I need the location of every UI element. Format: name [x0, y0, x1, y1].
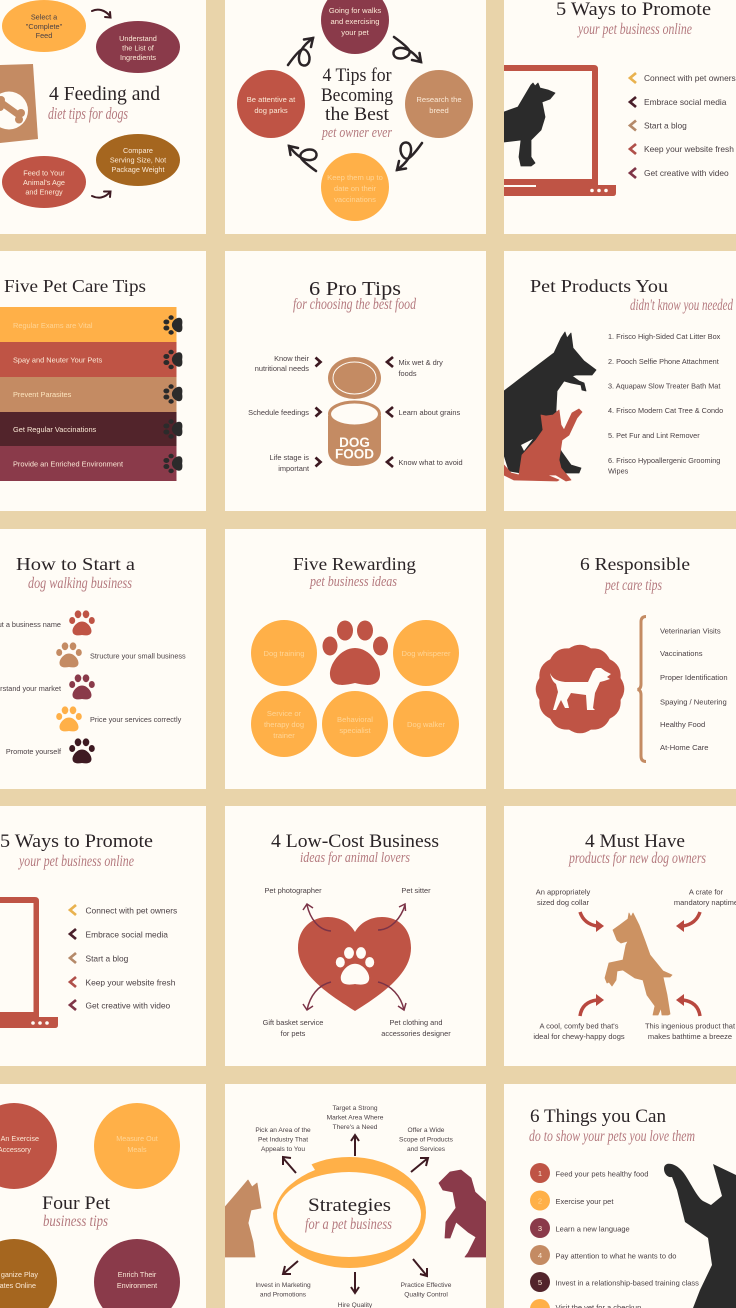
icon: dog silhouette [439, 1170, 486, 1257]
right tips: Know what to avoid [398, 458, 463, 467]
circle: dog walker: Dog walker [407, 720, 445, 729]
step: price services [56, 706, 182, 731]
circle: research the breed: Research the [416, 95, 462, 104]
label: marketing: Invest in Marketing [255, 1282, 311, 1289]
left tips: nutritional needs [255, 364, 309, 373]
arrow: loop top left [288, 38, 313, 66]
circle: going for walks: and exercising [331, 17, 379, 26]
list with chevrons: Start a blog [644, 120, 687, 130]
arrow: loop bottom left [289, 146, 317, 171]
product list: 4. Frisco Modern Cat Tree & Condo [608, 406, 723, 415]
circle: measure out meals: Meals [127, 1145, 147, 1154]
step 4: Pay attention to what he wants to do [556, 1252, 676, 1260]
care list: Vaccinations [660, 649, 703, 658]
circle: going for walks: Going for walks [329, 6, 381, 15]
bubble: select a complete feed: Select a [31, 12, 58, 22]
bubble: understand the list of ingredients: Ingredients [120, 53, 156, 62]
step 2 [530, 1190, 614, 1210]
bar: prevent parasites: Prevent Parasites [13, 390, 72, 399]
icon: cat silhouette [504, 409, 582, 481]
title: 4 Must Have [585, 831, 685, 852]
title: 4 Low-Cost Business [271, 831, 439, 852]
icon: laptop [0, 897, 58, 1028]
label: bed: A cool, comfy bed that's [540, 1022, 619, 1030]
circle: service dog trainer: therapy dog [264, 720, 304, 729]
arrow: loop bottom right [397, 142, 422, 170]
card: 4 feeding and diet tips [0, 0, 206, 234]
circle: behavioral specialist: Behavioral [337, 715, 373, 724]
circle: research the breed: breed [429, 106, 449, 115]
care list: Healthy Food [660, 720, 705, 729]
product list: 6. Frisco Hypoallergenic Grooming [608, 456, 720, 465]
list with chevrons: Get creative with video [644, 168, 729, 178]
icon: dog food can: DOG [339, 435, 370, 450]
bar: regular exams [0, 307, 176, 342]
bubble: select a complete feed [2, 0, 86, 52]
step: price services: Price your services correctly [90, 715, 182, 724]
title: Four Pet [42, 1193, 111, 1214]
bubble: understand the list of ingredients [96, 21, 180, 73]
card: strategies for a pet business [225, 1084, 486, 1308]
icon: dog silhouette [504, 83, 555, 166]
left tips [248, 354, 320, 473]
bar: spay and neuter: Spay and Neuter Your Pets [13, 356, 102, 364]
circle: service dog trainer [251, 691, 317, 757]
step: structure: Structure your small business [90, 652, 186, 660]
card: five pet care tips [0, 251, 206, 511]
icon: laptop [504, 65, 616, 196]
subtitle script: your pet business online [18, 853, 134, 870]
circle: dog walker [393, 691, 459, 757]
title: How to Start a [16, 554, 135, 574]
subtitle script: your pet business online [577, 21, 692, 38]
arrow: top curve [92, 10, 110, 18]
title: 4 Tips for [322, 65, 392, 86]
list with chevrons [70, 905, 177, 1010]
subtitle script: business tips [43, 1213, 108, 1230]
right tips [387, 357, 463, 467]
circle: be attentive at dog parks: dog parks [254, 106, 288, 115]
icon: cat silhouette [664, 1164, 736, 1308]
left tips: Know their [274, 354, 310, 363]
subtitle script: diet tips for dogs [48, 104, 128, 123]
step 1: 1 [538, 1169, 542, 1178]
circle: be attentive at dog parks: Be attentive at [247, 95, 296, 104]
label: pet photographer: Pet photographer [264, 886, 322, 895]
card: how to start a dog walking business [0, 529, 206, 789]
label: quality control: Quality Control [404, 1292, 448, 1298]
label: marketing: and Promotions [260, 1292, 307, 1298]
left tips: Life stage is [270, 453, 309, 462]
title: Five Rewarding [293, 554, 416, 574]
subtitle script: pet business ideas [309, 574, 397, 590]
card: 4 must have products [504, 806, 736, 1066]
right tips: Learn about grains [398, 408, 460, 417]
icon: heart with paw [298, 917, 411, 1011]
circle: organize play dates: ganize Play [1, 1270, 38, 1279]
label: gift basket: Gift basket service [263, 1018, 323, 1027]
icon: big paw [322, 620, 388, 685]
step 5 [530, 1272, 699, 1292]
circle: organize play dates: ates Online [0, 1281, 36, 1290]
circle: organize play dates [0, 1239, 57, 1308]
icon: cat silhouette [225, 1180, 261, 1257]
circle: enrich environment [94, 1239, 180, 1308]
subtitle script: pet owner ever [321, 125, 392, 141]
circle: exercise accessory: An Exercise [1, 1134, 39, 1143]
label: clothing designer: accessories designer [381, 1029, 451, 1038]
title: 6 Pro Tips [309, 278, 401, 300]
list with chevrons: Connect with pet owners [86, 906, 177, 916]
circle: keep vaccinations up to date [321, 153, 389, 221]
label: pick an area: Pet Industry That [258, 1136, 308, 1144]
step 6 [530, 1299, 641, 1308]
step 5: Invest in a relationship-based training class [556, 1278, 699, 1288]
bubble: select a complete feed: Feed [36, 31, 52, 40]
step 2: Exercise your pet [556, 1197, 614, 1206]
circle: behavioral specialist: specialist [339, 726, 372, 735]
label: dog collar: An appropriately [536, 888, 591, 896]
title: 5 Ways to Promote [0, 831, 153, 852]
gap between dog legs [521, 439, 533, 451]
circle: enrich environment: Enrich Their [118, 1270, 157, 1279]
icon: badge with dog [536, 645, 624, 733]
step 3: 3 [538, 1224, 542, 1233]
left tips: important [278, 464, 309, 473]
icon: dog silhouette [504, 332, 596, 473]
circle: dog whisperer: Dog whisperer [402, 649, 451, 658]
list with chevrons: Embrace social media [644, 97, 727, 107]
label: offer wide scope: Scope of Products [399, 1136, 454, 1144]
subtitle script: for a pet business [305, 1216, 392, 1233]
list with chevrons: Get creative with video [86, 1000, 171, 1010]
circle: keep vaccinations up to date: date on their [334, 184, 377, 193]
icon: dog food can: FOOD [335, 446, 374, 462]
bubble: feed to age and energy: Feed to Your [23, 168, 65, 178]
arrows around ring [283, 1135, 428, 1293]
subtitle script: ideas for animal lovers [300, 850, 410, 866]
list with chevrons [630, 73, 736, 178]
label: quality control: Practice Effective [401, 1282, 452, 1289]
card: 6 things you can do [504, 1084, 736, 1308]
bubble: understand the list of ingredients: the List of [122, 44, 155, 52]
right tips: foods [398, 369, 417, 378]
circle: measure out meals: Measure Out [116, 1134, 158, 1143]
bubble: compare serving size: Package Weight [111, 165, 165, 174]
label: target market: Target a Strong [332, 1105, 378, 1112]
label: crate: A crate for [689, 888, 724, 896]
step: promote: Promote yourself [6, 747, 62, 756]
step 2: 2 [538, 1196, 542, 1206]
card: five rewarding pet business ideas [225, 529, 486, 789]
circle: service dog trainer: trainer [273, 731, 295, 740]
bar: vaccinations [0, 412, 176, 446]
bubble: feed to age and energy: and Energy [25, 188, 63, 196]
step: business name [0, 610, 95, 635]
product list: 1. Frisco High-Sided Cat Litter Box [608, 332, 721, 341]
care list: Proper Identification [660, 673, 728, 682]
bar: spay and neuter [0, 342, 176, 377]
circle: keep vaccinations up to date: vaccinations [334, 195, 376, 204]
step 4: 4 [538, 1251, 542, 1260]
bubble: select a complete feed: "Complete" [26, 22, 63, 31]
circle: keep vaccinations up to date: Keep them up to [327, 173, 383, 182]
arrows toward dog [580, 912, 700, 1016]
step 3: Learn a new language [556, 1224, 630, 1234]
circle: dog training: Dog training [264, 649, 304, 658]
product list: Wipes [608, 466, 629, 476]
card: 4 low-cost business ideas [225, 806, 486, 1066]
label: target market: There's a Need [333, 1124, 378, 1131]
list with chevrons: Keep your website fresh [644, 144, 734, 154]
circle: service dog trainer: Service or [267, 709, 302, 718]
bubble: feed to age and energy [2, 156, 86, 208]
bar: prevent parasites [0, 377, 176, 412]
bubble: compare serving size [96, 134, 180, 186]
label: offer wide scope: and Services [407, 1146, 446, 1153]
card: 5 ways to promote (lower) [0, 806, 206, 1066]
care list: Veterinarian Visits [660, 626, 721, 636]
list with chevrons: Start a blog [86, 954, 129, 964]
label: bath product: makes bathtime a breeze [648, 1032, 732, 1041]
title: Five Pet Care Tips [4, 276, 146, 296]
icon: terrier silhouette [605, 913, 672, 1015]
title: Pet Products You [530, 276, 668, 296]
label: target market: Market Area Where [327, 1114, 384, 1122]
bubble: understand the list of ingredients: Understand [119, 34, 157, 43]
label: pet sitter: Pet sitter [401, 886, 431, 895]
icon: food bag with bone [0, 64, 38, 143]
title: 6 Things you Can [530, 1106, 666, 1127]
product list: 3. Aquapaw Slow Treater Bath Mat [608, 382, 720, 390]
bubble: compare serving size: Compare [123, 146, 153, 155]
card: 5 ways to promote (top) [504, 0, 736, 234]
circle: behavioral specialist [322, 691, 388, 757]
right tips: Mix wet & dry [398, 358, 443, 367]
circle: measure out meals [94, 1103, 180, 1189]
subtitle script: pet care tips [604, 577, 662, 594]
label: dog collar: sized dog collar [537, 898, 590, 907]
list with chevrons: Keep your website fresh [86, 978, 176, 988]
icons: paws on bars [163, 315, 182, 473]
step 4 [530, 1245, 676, 1265]
bar: enriched environment [0, 446, 176, 481]
bar: regular exams: Regular Exams are Vital [13, 321, 93, 330]
card: pet products [504, 251, 736, 511]
circle: exercise accessory [0, 1103, 57, 1189]
title: 4 Feeding and [49, 83, 160, 105]
left tips: Schedule feedings [248, 408, 309, 417]
bar: vaccinations: Get Regular Vaccinations [13, 425, 97, 434]
step: structure [56, 642, 186, 667]
subtitle script: dog walking business [28, 575, 132, 592]
label: gift basket: for pets [281, 1029, 306, 1038]
brace [638, 616, 646, 762]
card: 6 responsible pet care tips [504, 529, 736, 789]
label: bed: ideal for chewy-happy dogs [533, 1032, 625, 1041]
label: pick an area: Appeals to You [261, 1146, 305, 1153]
label: pick an area: Pick an Area of the [255, 1127, 311, 1134]
list with chevrons: Connect with pet owners [644, 73, 736, 83]
step 1: Feed your pets healthy food [556, 1170, 648, 1178]
card: 4 tips for becoming the best pet owner [225, 0, 486, 234]
bubble: compare serving size: Serving Size, Not [110, 156, 166, 164]
title: Becoming [321, 85, 393, 106]
bubble: feed to age and energy: Animal's Age [23, 178, 65, 187]
circle: be attentive at dog parks [237, 70, 305, 138]
brush ring [268, 1157, 426, 1268]
arrow: loop top right [393, 37, 421, 62]
circle: research the breed [405, 70, 473, 138]
arrow: bottom curve [92, 192, 110, 198]
bar: enriched environment: Provide an Enriched Environment [13, 460, 123, 468]
subtitle script: for choosing the best food [293, 296, 417, 313]
title: Strategies [308, 1195, 391, 1216]
arrows from heart [303, 904, 406, 1010]
step 5: 5 [538, 1278, 542, 1287]
care list: At-Home Care [660, 743, 709, 752]
product list: 2. Pooch Selfie Phone Attachment [608, 357, 719, 366]
step: understand market [0, 674, 95, 699]
circle: going for walks [321, 0, 389, 54]
care list: Spaying / Neutering [660, 698, 727, 706]
circle: dog training [251, 620, 317, 686]
card: four pet business tips [0, 1084, 206, 1308]
circle: dog whisperer [393, 620, 459, 686]
title: 6 Responsible [580, 554, 690, 574]
label: offer wide scope: Offer a Wide [408, 1127, 445, 1134]
step 3 [530, 1218, 630, 1238]
product list: 5. Pet Fur and Lint Remover [608, 431, 700, 440]
label: bath product: This ingenious product that [645, 1022, 736, 1030]
label: clothing designer: Pet clothing and [389, 1018, 443, 1027]
step: promote [6, 738, 95, 763]
title: the Best [325, 104, 390, 125]
card: 6 pro tips [225, 251, 486, 511]
step 1 [530, 1163, 648, 1183]
circle: going for walks: your pet [341, 28, 370, 37]
list with chevrons: Embrace social media [86, 930, 168, 940]
icon: dog food can [328, 357, 381, 466]
circle: enrich environment: Environment [117, 1281, 157, 1290]
